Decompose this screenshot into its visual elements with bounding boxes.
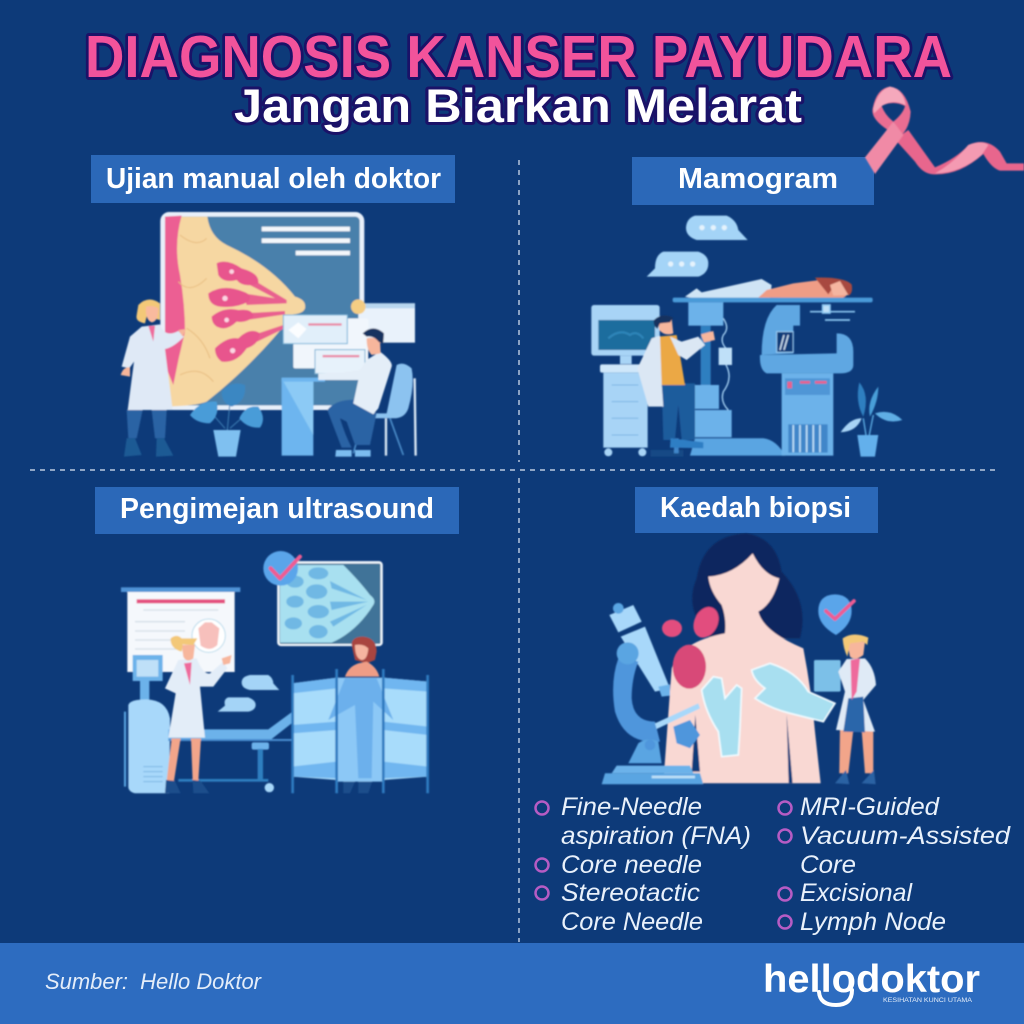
heading: Mamogram (632, 157, 874, 205)
list: biopsy methods left: Stereotactic (561, 879, 701, 907)
logo: KESIHATAN KUNCI UTAMA (883, 998, 972, 1004)
doctor standing (165, 636, 232, 793)
title: DIAGNOSIS KANSER PAYUDARA (85, 24, 952, 90)
microscope (602, 603, 703, 784)
footer bar (0, 943, 1024, 1024)
woman torso (663, 533, 821, 783)
panel: mammogram illustration (591, 216, 902, 457)
icon: check badge (263, 551, 300, 586)
screen trolley (591, 305, 660, 456)
list: biopsy methods right: Vacuum-Assisted (800, 822, 1011, 850)
heading: Ujian manual oleh doktor (91, 155, 455, 203)
list: biopsy methods right: Excisional (800, 879, 913, 907)
list: biopsy methods right: Lymph Node (800, 908, 946, 936)
potted plant (841, 382, 902, 457)
gloved hands (702, 663, 835, 757)
icon: check bubble (818, 594, 854, 635)
list: biopsy methods left: Core needle (561, 851, 702, 879)
breast scan image (278, 562, 382, 645)
list: biopsy methods right (778, 793, 1011, 936)
monitor with breast anatomy (163, 214, 362, 408)
heading: Ujian manual oleh doktor: Ujian manual oleh doktor (106, 163, 441, 195)
panel: manual exam illustration (121, 214, 416, 457)
presentation board (121, 587, 240, 672)
list: biopsy methods left: Fine-Needle (561, 793, 702, 821)
machine body right (760, 305, 855, 456)
doctor presenting (121, 300, 186, 457)
list: biopsy methods right: Core (800, 851, 856, 879)
machine column left (688, 302, 785, 456)
panel: biopsy illustration (602, 533, 876, 784)
desk (282, 378, 325, 456)
panel: ultrasound illustration (121, 551, 428, 793)
list: biopsy methods left: aspiration (FNA) (561, 822, 751, 850)
list: biopsy methods left (536, 793, 751, 936)
speech bubbles (647, 216, 748, 277)
patient on table (673, 278, 873, 302)
heading: Pengimejan ultrasound (95, 487, 459, 534)
doctor with clipboard (814, 634, 876, 784)
ultrasound machine (125, 655, 170, 793)
source text: Sumber: Hello Doktor (45, 969, 263, 994)
plant (190, 383, 263, 457)
logo: hellodoktor (763, 958, 980, 1001)
heading: Kaedah biopsi (635, 487, 878, 533)
examination bed (168, 700, 315, 792)
cells (662, 603, 723, 689)
list: biopsy methods left: Core Needle (561, 908, 703, 936)
doctor seated (637, 315, 715, 457)
subtitle: Jangan Biarkan Melarat (234, 79, 802, 132)
seated man with chair (318, 328, 416, 457)
speech bubbles (218, 675, 279, 712)
icon: pink ribbon (865, 87, 1024, 174)
folding screen (292, 669, 428, 793)
heading: Kaedah biopsi: Kaedah biopsi (660, 492, 851, 524)
dividers (30, 160, 1000, 942)
heading: Mamogram: Mamogram (678, 163, 838, 195)
patient behind screen (343, 637, 379, 793)
heading: Pengimejan ultrasound: Pengimejan ultrasound (120, 493, 434, 525)
list: biopsy methods right: MRI-Guided (800, 793, 940, 821)
computer screens (283, 299, 415, 374)
